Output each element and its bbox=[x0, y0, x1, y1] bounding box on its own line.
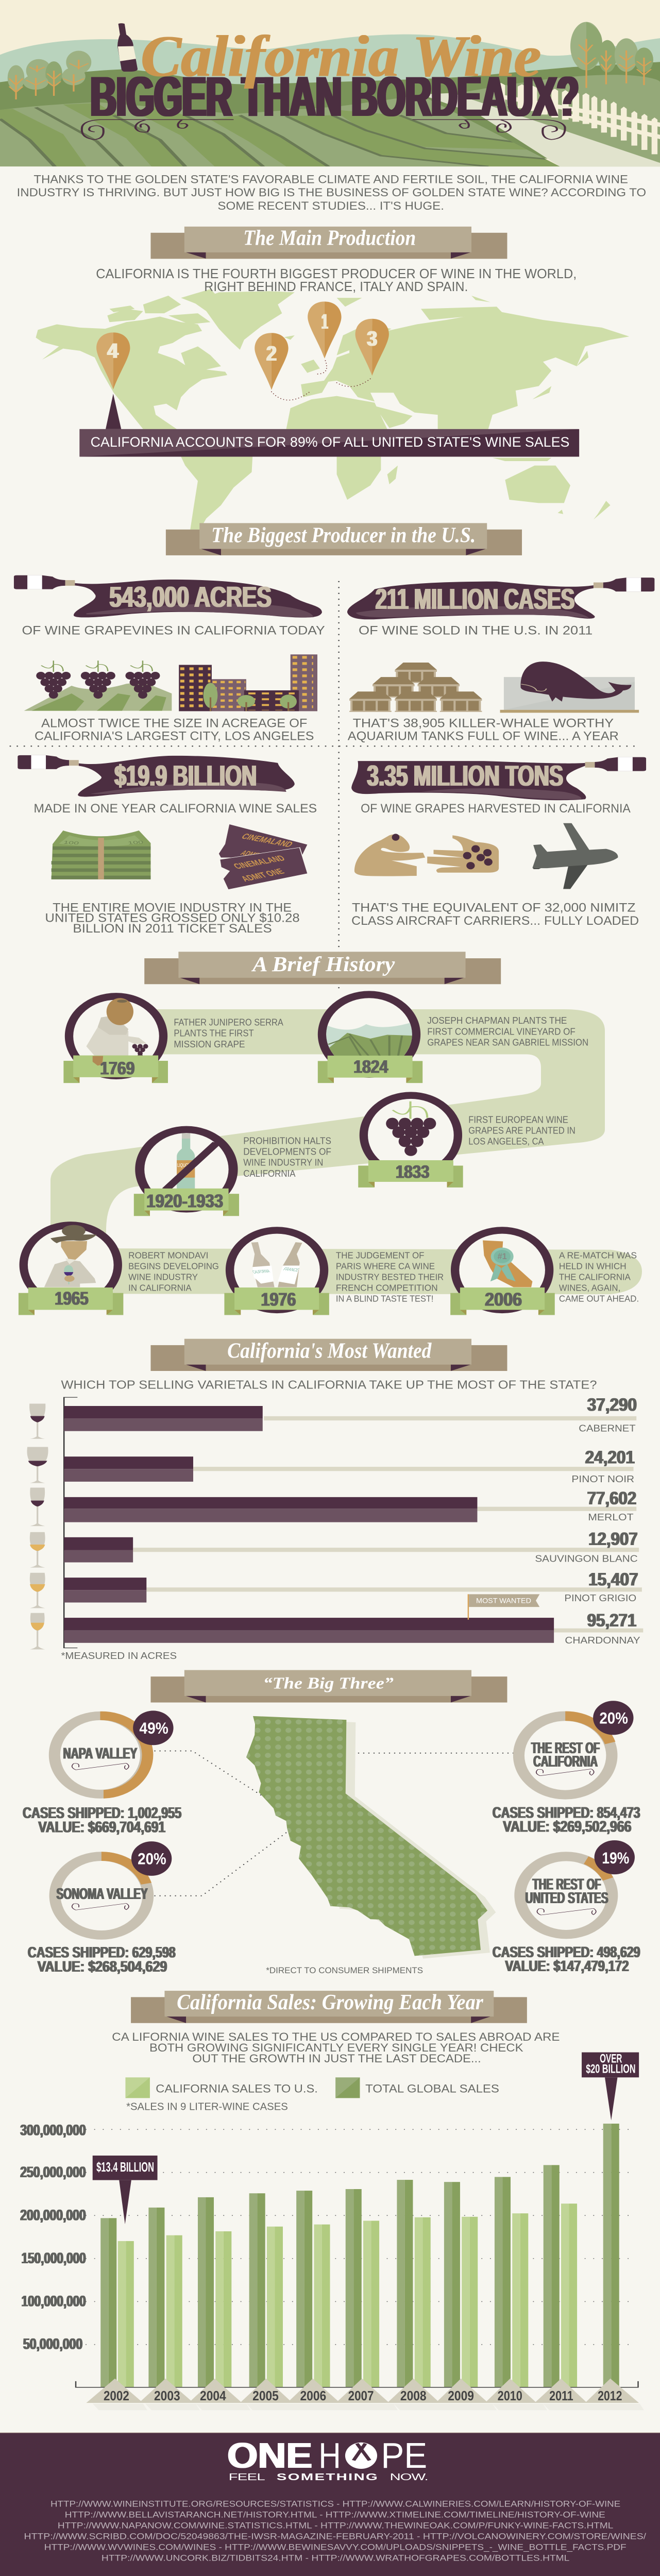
movie caption bbox=[45, 901, 300, 935]
year labels: 2011 bbox=[549, 2388, 573, 2403]
section: sales chart: 200,000,000 bbox=[20, 2207, 86, 2224]
banner: sales growing bbox=[131, 1990, 527, 2023]
year ribbon: 1920-1933 bbox=[134, 1189, 239, 1216]
callout: 13.4 billion bbox=[93, 2156, 158, 2224]
timeline event: 1976: CALIFORNIA bbox=[251, 1268, 271, 1275]
section: sales chart: 250,000,000 bbox=[20, 2164, 86, 2181]
year labels: 2010 bbox=[498, 2388, 522, 2403]
connector dotted lines bbox=[155, 1751, 514, 1896]
logo: onehope: NOW. bbox=[390, 2472, 429, 2483]
icon: wine bottle bbox=[117, 23, 138, 72]
section: varietal bar chart bbox=[27, 1378, 643, 1661]
year labels: 2003 bbox=[154, 2388, 180, 2403]
timeline event: prohibition ring and bottle bbox=[135, 1126, 238, 1213]
icon: whale in aquarium bbox=[500, 662, 639, 713]
text: prohibition bbox=[243, 1135, 331, 1179]
donut: sonoma valley 20% bbox=[49, 1841, 172, 1940]
section: history bottom: WINE INDUSTRY bbox=[128, 1272, 198, 1282]
section: biggest producer stats: CALIFORNIA'S LARGEST CITY, LOS ANGELES bbox=[35, 729, 314, 743]
chart axis bbox=[64, 1397, 77, 1648]
section: sales chart: 300,000,000 bbox=[20, 2122, 86, 2139]
year labels: 2006 bbox=[300, 2388, 326, 2403]
section: big three: CASES SHIPPED: 1,002,955 bbox=[23, 1804, 181, 1822]
icon: movie tickets: CINEMALAND bbox=[231, 854, 287, 871]
text: 1976 bbox=[336, 1250, 444, 1304]
bars: 2003 bbox=[148, 2208, 182, 2387]
section: big three: 49% bbox=[139, 1719, 168, 1737]
legend: california sales bbox=[125, 2077, 318, 2098]
section: history bottom: ROBERT MONDAVI bbox=[128, 1250, 208, 1261]
icon: bottle pouring bbox=[18, 755, 79, 769]
timeline event: 1976: FRANCE bbox=[282, 1266, 300, 1273]
section: biggest producer stats: OF WINE GRAPEVINES IN CALIFORNIA TODAY bbox=[22, 623, 325, 637]
icon: stack of money: 100 bbox=[63, 840, 80, 845]
icon: stack of money bbox=[52, 831, 150, 879]
icon: wine glass merlot bbox=[30, 1488, 45, 1526]
timeline event: 2006: 2006 bbox=[485, 1289, 522, 1310]
y axis labels bbox=[20, 2122, 86, 2352]
section: history top bbox=[45, 901, 639, 1213]
title flourish left bbox=[82, 120, 233, 140]
icon: los angeles skyline bbox=[179, 654, 317, 711]
section: sales chart: 100,000,000 bbox=[22, 2293, 86, 2310]
icon: wine glass cabernet bbox=[29, 1404, 45, 1439]
timeline event: 2006 bbox=[450, 1227, 555, 1315]
section: history top: THE ENTIRE MOVIE INDUSTRY IN THE bbox=[53, 901, 292, 914]
section: history top: UNITED STATES GROSSED ONLY $10.28 bbox=[45, 911, 300, 925]
donut: napa valley 49% bbox=[49, 1710, 174, 1799]
legend: global sales bbox=[335, 2077, 499, 2098]
map pin 1 bbox=[308, 301, 342, 359]
section: history top: FATHER JUNIPERO SERRA bbox=[174, 1016, 283, 1028]
section: history top: PROHIBITION HALTS bbox=[243, 1135, 331, 1146]
bars: 2009 bbox=[444, 2182, 478, 2387]
icon: wine glass chardonnay bbox=[30, 1613, 45, 1650]
section: big three: SONOMA VALLEY bbox=[56, 1885, 148, 1902]
section: history bottom: THE JUDGEMENT OF bbox=[336, 1250, 424, 1261]
icon: wine glass pinot noir bbox=[27, 1447, 48, 1483]
logo: onehope: ONE bbox=[227, 2436, 312, 2476]
section: sales intro: *SALES IN 9 LITER-WINE CASES bbox=[126, 2101, 288, 2112]
bar: sauvignon blanc bbox=[64, 1528, 639, 1564]
icon: vineyard hill with grapes bbox=[24, 660, 172, 711]
caption: killer whale tanks bbox=[348, 716, 619, 743]
section: biggest producer stats: ALMOST TWICE THE SIZE IN ACREAGE OF bbox=[41, 716, 307, 730]
section: history bottom: IN CALIFORNIA bbox=[128, 1283, 192, 1293]
text: 1833 bbox=[468, 1114, 576, 1146]
year labels: 2009 bbox=[448, 2388, 474, 2403]
year labels: 2007 bbox=[348, 2388, 374, 2403]
year labels: 2012 bbox=[598, 2388, 622, 2403]
right trees bbox=[570, 22, 653, 88]
bars: 2011 bbox=[544, 2165, 577, 2387]
stats: rest of california bbox=[493, 1804, 640, 1835]
section: biggest producer stats: 543,000 ACRES bbox=[109, 581, 272, 613]
bars: 2012 bbox=[603, 2124, 619, 2387]
text: prohibition: CALIFORNIA bbox=[243, 1168, 296, 1179]
text: 1965 bbox=[128, 1250, 219, 1293]
y axis labels: 50,000,000 bbox=[23, 2335, 82, 2352]
bar: pinot grigio bbox=[64, 1569, 642, 1603]
icon: movie tickets bbox=[219, 824, 308, 890]
timeline event: 1965: 1965 bbox=[55, 1288, 89, 1309]
section: big three: NAPA VALLEY bbox=[63, 1744, 137, 1762]
year labels bbox=[86, 2379, 644, 2410]
icon: movie tickets: ADMIT ONE bbox=[239, 867, 286, 884]
section: history bottom: BEGINS DEVELOPING bbox=[128, 1261, 219, 1272]
section: sales intro: CASES SHIPPED: 629,598 bbox=[28, 1944, 176, 1961]
icon: bottle pouring bbox=[594, 578, 654, 591]
banner: the main production: The Main Production bbox=[243, 226, 416, 250]
text: 1824 bbox=[427, 1015, 588, 1048]
stat: 211 million cases bbox=[347, 582, 595, 619]
left trees bbox=[8, 50, 91, 99]
timeline event: 1976: 1976 bbox=[261, 1289, 296, 1310]
footer panel bbox=[0, 2432, 660, 2576]
section: biggest producer stats: $19.9 BILLION bbox=[114, 759, 257, 792]
pin dotted routes bbox=[272, 361, 373, 400]
section: sales chart bbox=[20, 2122, 644, 2410]
text: 2006 bbox=[559, 1250, 639, 1304]
banner: a brief history bbox=[144, 952, 501, 984]
section: big three: 20% bbox=[138, 1850, 166, 1868]
text: 1769: MISSION GRAPE bbox=[174, 1039, 245, 1049]
icon: bottle pouring bbox=[585, 757, 646, 771]
section: history bottom: PARIS WHERE CA WINE bbox=[336, 1261, 435, 1272]
chart x axis bbox=[76, 2381, 638, 2387]
section: history top: WINE INDUSTRY IN bbox=[243, 1157, 323, 1168]
timeline event: 1769: 1769 bbox=[100, 1058, 134, 1078]
banner: the main production bbox=[150, 226, 507, 259]
timeline event: 1965 bbox=[19, 1222, 123, 1315]
stat: 19.9 billion bbox=[78, 756, 295, 797]
banner: a brief history: A Brief History bbox=[251, 953, 395, 976]
text: 1769: PLANTS THE FIRST bbox=[174, 1027, 254, 1039]
year labels: 2004 bbox=[200, 2388, 226, 2403]
logo: onehope: FEEL bbox=[229, 2472, 265, 2483]
dividers bbox=[10, 582, 640, 990]
map pin 2 bbox=[255, 333, 289, 390]
logo: onehope: H bbox=[318, 2436, 341, 2476]
section: history top: DEVELOPMENTS OF bbox=[243, 1146, 331, 1157]
map pin 3: 3 bbox=[367, 327, 377, 350]
world map bbox=[36, 289, 629, 530]
donut: rest of california 20% bbox=[513, 1701, 634, 1800]
map pin 4 bbox=[96, 332, 130, 389]
title flourish right bbox=[413, 120, 565, 140]
timeline ribbon bbox=[50, 1009, 642, 1294]
movie caption: BILLION IN 2011 TICKET SALES bbox=[73, 921, 272, 935]
icon: stack of money: 100 bbox=[127, 839, 144, 845]
section: big three bbox=[23, 1701, 640, 1959]
year labels: 2002 bbox=[104, 2388, 129, 2403]
icon: stacked wine crates bbox=[349, 663, 482, 712]
banner: the big three: “The Big Three” bbox=[263, 1674, 394, 1692]
map pin 1: 1 bbox=[321, 310, 328, 333]
section: sales chart: $13.4 BILLION bbox=[96, 2160, 154, 2175]
section: history bottom: IN A BLIND TASTE TEST! bbox=[336, 1294, 433, 1304]
banner: most wanted bbox=[150, 1338, 507, 1371]
timeline event: prohibition ring and bottle: LIQUOR bbox=[177, 1162, 191, 1168]
intro text bbox=[17, 173, 646, 212]
section: main production bbox=[36, 226, 629, 555]
map: california bbox=[246, 1716, 496, 1959]
caption: twice LA bbox=[35, 716, 314, 743]
section: biggest producer stats: MADE IN ONE YEAR CALIFORNIA WINE SALES bbox=[33, 801, 317, 815]
banner: biggest producer bbox=[166, 523, 522, 555]
sources list bbox=[24, 2499, 647, 2563]
bars: 2010 bbox=[495, 2177, 528, 2387]
icon: movie tickets: CINEMALAND bbox=[239, 832, 295, 849]
chart gridlines bbox=[86, 2129, 636, 2345]
bars: 2008 bbox=[397, 2180, 431, 2387]
icon: bottle pouring bbox=[14, 575, 75, 589]
section: history bottom: FRENCH COMPETITION bbox=[336, 1283, 438, 1293]
stat: 543,000 acres bbox=[74, 580, 322, 618]
section: sales intro: CALIFORNIA SALES TO U.S. bbox=[156, 2082, 318, 2095]
timeline event: 1824 bbox=[318, 991, 422, 1083]
bars: 2005 bbox=[249, 2193, 283, 2387]
map pin 4: 4 bbox=[107, 339, 119, 363]
bar: cabernet bbox=[64, 1394, 637, 1434]
icon: wine glass pinot grigio bbox=[30, 1573, 45, 1608]
section: biggest producer stats bbox=[14, 575, 654, 890]
bar: pinot noir bbox=[64, 1447, 635, 1484]
banner: the big three bbox=[150, 1670, 507, 1703]
callout: 89% of sales bbox=[79, 429, 579, 456]
icon: hands holding grapes bbox=[354, 834, 499, 876]
bars: 2002 bbox=[100, 2218, 134, 2387]
footnote: measured in acres: *MEASURED IN ACRES bbox=[61, 1650, 177, 1661]
map pin 2: 2 bbox=[266, 342, 277, 365]
icon: movie tickets: ADMIT bbox=[239, 849, 263, 859]
timeline event: 1824: 1824 bbox=[353, 1056, 388, 1077]
year labels: 2008 bbox=[400, 2388, 427, 2403]
aircraft carrier caption bbox=[351, 901, 639, 927]
stats: napa valley bbox=[23, 1804, 181, 1836]
bars: 2007 bbox=[346, 2189, 379, 2387]
bars: 2006 bbox=[296, 2191, 330, 2387]
callout pointer bbox=[106, 394, 121, 429]
section: sales intro: VALUE: $268,504,629 bbox=[38, 1958, 167, 1975]
bar: chardonnay bbox=[64, 1609, 643, 1646]
logo: onehope bbox=[227, 2436, 429, 2483]
section: big three: VALUE: $669,704,691 bbox=[38, 1818, 165, 1836]
timeline event: 1976 bbox=[224, 1227, 329, 1315]
year labels: 2005 bbox=[252, 2388, 279, 2403]
logo: onehope: SOMETHING bbox=[277, 2472, 378, 2483]
flag: most wanted: MOST WANTED bbox=[476, 1597, 531, 1605]
flag: most wanted bbox=[468, 1594, 539, 1620]
map pin 3 bbox=[356, 319, 389, 376]
donut: rest of united states 19% bbox=[514, 1840, 635, 1939]
section: history bottom: 1920-1933 bbox=[146, 1190, 223, 1211]
text: fourth biggest producer bbox=[96, 267, 577, 294]
text: 1833: LOS ANGELES, CA bbox=[468, 1136, 544, 1146]
icon: wine glass sauvignon blanc bbox=[30, 1532, 45, 1568]
stat: 3.35 million tons bbox=[351, 759, 586, 800]
paragraph: sales growth bbox=[112, 2030, 560, 2065]
timeline event: 1833: 1833 bbox=[396, 1161, 429, 1182]
logo: onehope: PE bbox=[381, 2436, 427, 2476]
stats: sonoma valley bbox=[28, 1944, 176, 1975]
section: sales chart: 150,000,000 bbox=[22, 2250, 86, 2267]
bars: 2004 bbox=[198, 2197, 231, 2387]
stats: rest of united states bbox=[493, 1943, 640, 1974]
section: sales intro bbox=[28, 1943, 640, 2112]
callout: over 20 billion bbox=[582, 2052, 639, 2121]
icon: airplane bbox=[532, 823, 618, 889]
timeline event: 1833 bbox=[358, 1092, 463, 1188]
hero illustration bbox=[0, 0, 660, 212]
timeline event: 2006: #1 bbox=[498, 1251, 507, 1261]
bar: merlot bbox=[64, 1488, 636, 1522]
text: 1769 bbox=[174, 1016, 283, 1049]
section: history bottom bbox=[19, 1189, 639, 1371]
timeline event: 1769 bbox=[63, 993, 168, 1083]
